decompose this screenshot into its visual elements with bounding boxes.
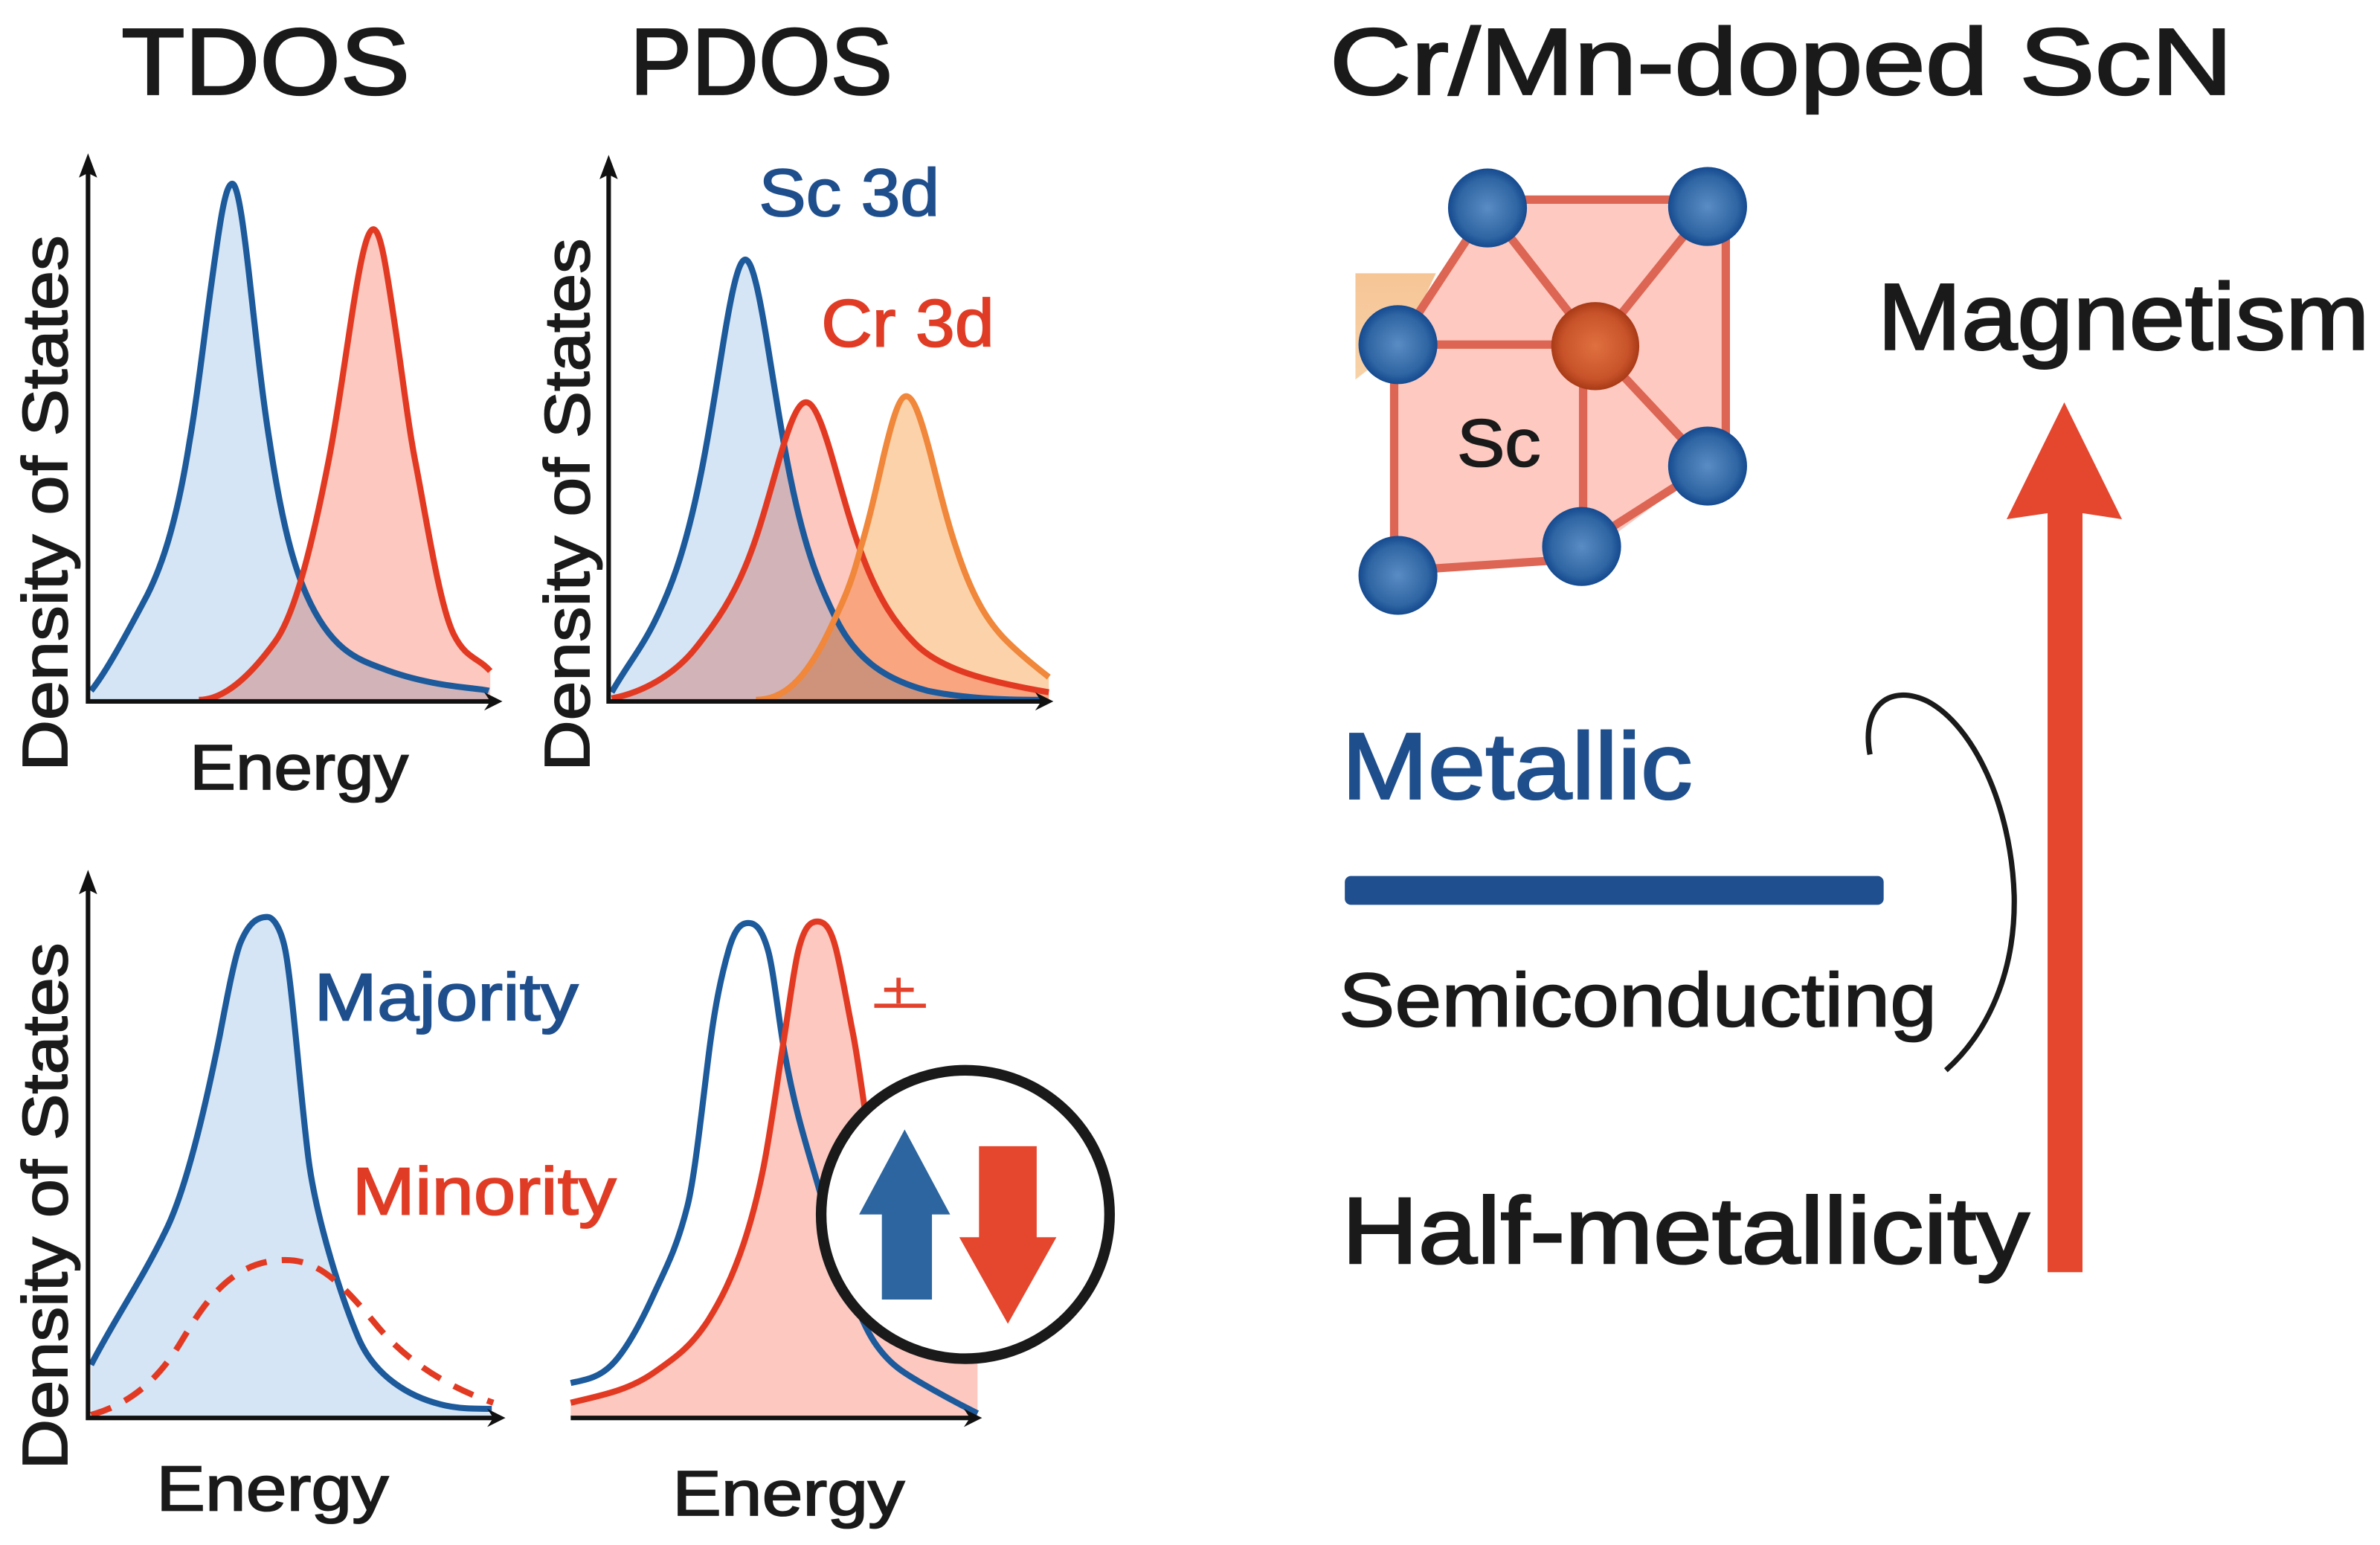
Majority label: Majority <box>314 960 579 1035</box>
red curve <box>570 922 868 1403</box>
majority curve <box>91 917 492 1409</box>
magnetism arrow <box>2007 402 2122 1272</box>
title: TDOS: TDOS <box>121 9 410 115</box>
Magnetism label: Magnetism <box>1877 263 2370 369</box>
red fill <box>570 922 977 1418</box>
spin down arrow <box>959 1146 1056 1324</box>
panel: spin chart <box>570 922 1110 1529</box>
orange fill <box>756 396 1049 701</box>
blue curve <box>91 184 489 691</box>
Sc 3d curve <box>611 260 1040 700</box>
panel: TDOS chart <box>10 153 503 803</box>
axis <box>570 1409 982 1427</box>
red curve <box>199 229 490 700</box>
panel: majority/minority chart <box>10 870 617 1525</box>
blue bar <box>1345 876 1884 905</box>
spin circle <box>821 1070 1110 1359</box>
axes <box>79 153 503 710</box>
x label: Energy <box>190 732 408 803</box>
minority dashed curve <box>91 1260 493 1415</box>
Sc 3d label: Sc 3d <box>759 156 939 231</box>
y label: Density of States <box>10 942 81 1470</box>
title: Cr/Mn-doped ScN: Cr/Mn-doped ScN <box>1330 9 2233 115</box>
red peak fill <box>199 229 490 701</box>
x label: Energy <box>672 1458 904 1529</box>
Cr 3d fill <box>611 402 1049 701</box>
Minority label: Minority <box>352 1155 617 1230</box>
atoms <box>1359 167 1747 615</box>
Semiconducting label: Semiconducting <box>1339 958 1937 1043</box>
y label: Density of States <box>532 238 603 771</box>
Cr 3d label: Cr 3d <box>821 286 994 361</box>
panel: crystal structure <box>1355 167 1747 615</box>
curved bracket <box>1868 695 2014 1070</box>
orange curve <box>756 396 1049 700</box>
panel: PDOS chart <box>532 155 1053 771</box>
spin up arrow <box>859 1129 951 1300</box>
Sc label: Sc <box>1457 407 1540 481</box>
Cr 3d curve <box>611 402 1049 698</box>
Half-metallicity label: Half-metallicity <box>1342 1178 2030 1283</box>
majority fill <box>91 917 492 1418</box>
orange corner <box>1355 273 1436 379</box>
pink lattice face <box>1393 199 1726 572</box>
axes <box>599 155 1053 710</box>
title: PDOS: PDOS <box>630 9 892 115</box>
Metallic label: Metallic <box>1342 713 1693 818</box>
y label: Density of States <box>10 235 81 771</box>
axes <box>79 870 506 1427</box>
blue peak fill <box>91 184 489 701</box>
x label: Energy <box>156 1454 389 1525</box>
central dopant atom <box>1551 302 1639 391</box>
blue curve <box>570 923 977 1413</box>
lattice bonds <box>1394 199 1726 571</box>
plus-minus label <box>875 977 926 1006</box>
Sc 3d fill <box>611 260 1040 701</box>
